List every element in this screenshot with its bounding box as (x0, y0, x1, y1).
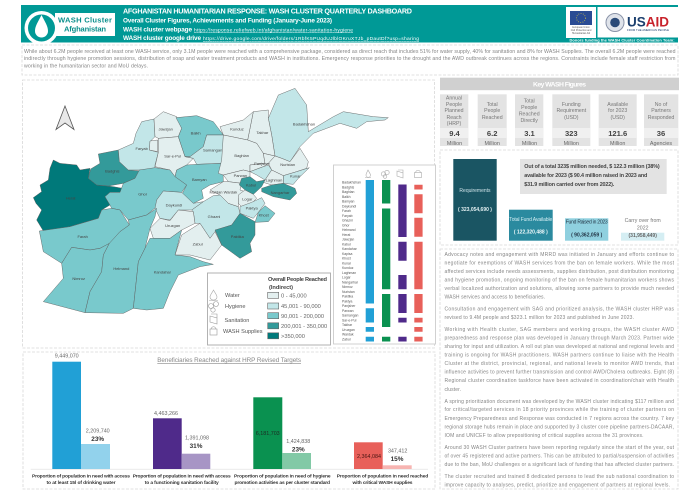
map labels: east: Panjsher (254, 161, 271, 166)
webpage link: https://response.reliefweb.int/afghanistan/water-sanitation-hygiene (194, 28, 353, 34)
legend box: (Indirect) (269, 285, 293, 291)
category labels: with critical WASH supplies (352, 480, 413, 486)
card: reached directly: People (521, 105, 537, 111)
paragraph: consultation: Consultation and engagement with SAG and prioritized analysis, the WASH cluster HRP was (444, 306, 674, 312)
province list: Ghor (342, 223, 350, 227)
province: Herat (33, 160, 123, 231)
province list: Takhar (342, 323, 353, 327)
province list: Kapisa (342, 252, 352, 256)
bars: sanitation (153, 411, 210, 469)
header banner (21, 5, 678, 45)
province: Wardak (210, 182, 245, 207)
province list: Nangarhar (342, 280, 359, 284)
bars: WASH supplies coverage (414, 185, 423, 342)
callout: funding summary: $31.9 million carried over from 2022). (524, 182, 615, 188)
province: Bamyan (175, 163, 223, 203)
paragraph: advocacy: WASH services and access to beneficiaries. (444, 294, 545, 300)
map labels: west: Helmand (113, 266, 129, 271)
province list: Wardak (342, 332, 354, 336)
paragraph: spring prioritization (444, 399, 674, 439)
province: Takhar (248, 110, 275, 156)
legend label: hygiene: Hygiene (225, 304, 246, 310)
province list: Kunduz (342, 266, 354, 270)
card: total reached: 6.2 (487, 129, 497, 138)
paragraph: advocacy: Advocacy notes and engagement with MRRD was initiated in January and efforts continue to (444, 252, 674, 258)
card: planned reach: 9.4 (449, 129, 461, 138)
google drive link: WASH cluster google drive (123, 35, 201, 42)
paragraph: consultation: revised to 9.4M people and $323.1 million for 2023 and published in June 2023. (444, 315, 634, 321)
province: Farah (39, 208, 129, 263)
card: reached directly (515, 94, 543, 147)
province list: Khost (342, 256, 351, 260)
bars: hygiene: 23% (292, 446, 305, 453)
icon: hygiene (208, 302, 218, 312)
card: planned reach: Million (447, 141, 462, 147)
category labels: Proportion of population in need of hygiene (234, 474, 331, 480)
map labels: east: Kabul (246, 183, 256, 188)
bars: critical supplies (354, 442, 412, 469)
logo: USAID: FROM THE AMERICAN PEOPLE (627, 28, 669, 32)
legend ranges (281, 293, 327, 340)
legend title: Overall People Reached (268, 277, 328, 283)
province list: Bamyan (342, 200, 355, 204)
province: Jawzjan (154, 112, 182, 138)
map labels: east: Kunar (290, 173, 301, 178)
paragraph: partners reporting (444, 445, 675, 468)
card: reached directly: 3.1 (524, 129, 536, 138)
map labels: west: Daykundi (166, 203, 182, 208)
map labels: east: Laghman (266, 178, 282, 183)
province: Samangan (185, 135, 223, 164)
category labels: Proportion of population in need reached (337, 474, 428, 480)
donors caption: Donors funding the WASH Cluster Coordination Team: (570, 37, 674, 42)
province: Badakhshan (268, 88, 388, 162)
card: available: for 2023 (608, 108, 627, 114)
legend ranges: 200,001 - 350,000 (281, 324, 327, 330)
panel: overview text: While about 6.2M people received at least one WASH service, only 3.1M people were reached with a comprehensive package, considered as direct reach that includes 51% for water supply, 40% for sanitation and 8% for WASH Supplies. The overall 6.2M people were reached (24, 49, 676, 55)
province: Helmand (85, 208, 157, 313)
panel: map (22, 80, 436, 348)
heading: Key WASH Figures (533, 82, 586, 89)
province: Baghlan (218, 135, 265, 175)
map labels: west: Samangan (203, 148, 222, 153)
map labels: west: Faryab (135, 146, 149, 151)
card: total reached: Reached (482, 115, 503, 121)
card: total reached: Million (485, 141, 500, 147)
province list: Daykundi (342, 204, 356, 208)
province: Nangarhar (262, 183, 297, 200)
card: funding requirement (552, 94, 590, 147)
province: Nuristan (268, 148, 308, 176)
callout: funding summary: Out of a total 323$ million needed, $ 122.3 million (38%) (524, 164, 660, 170)
province: Kapisa (250, 165, 272, 180)
province list: Faryab (342, 214, 353, 218)
category labels: to at least 15l of drinking water (46, 480, 116, 486)
map labels: east: Parwan (234, 173, 247, 178)
card: reached directly: Million (522, 141, 537, 147)
paragraph: AWD preparedness: cluster. (444, 387, 461, 393)
logo: EU civil protection (566, 7, 596, 38)
logo: WASH Cluster Afghanistan (24, 11, 115, 45)
legend label: supplies: WASH Supplies (223, 329, 263, 335)
legend label: sanitation: Sanitation (224, 318, 249, 324)
paragraph: sub national coordination: The cluster recruited and trained 8 dedicated persons to lead the sub national coordination to (444, 474, 674, 480)
map labels: east: Maidan Wardak (209, 190, 237, 195)
legend ranges: 0 - 45,000 (281, 293, 307, 299)
bars: water: 9,449,070 (55, 354, 79, 360)
map labels: west: Jawzjan (158, 127, 173, 132)
map labels: east: Nangarhar (271, 190, 290, 195)
card: funding requirement: (USD) (564, 115, 579, 121)
paragraph: sub national coordination (444, 474, 674, 488)
legend ranges: 45,001 - 90,000 (281, 304, 321, 310)
card: planned reach: People (446, 102, 462, 108)
paragraph: AWD preparedness: training is ongoing for WASH practitioners. WASH partners continue to liaise with the Health (444, 352, 674, 358)
category labels: Proportion of population in need with access (133, 474, 231, 480)
map labels: east: Baghlan (234, 153, 249, 158)
bar: carry over (621, 218, 664, 241)
province list: Logar (342, 276, 352, 280)
bar: fund raised: ( 90,362,059 ) (571, 232, 603, 238)
province: Paktika (215, 213, 255, 258)
province list (342, 180, 361, 341)
paragraph: advocacy: negotiate for exemptions of WASH services from the ban on female workers. While the most (444, 260, 675, 266)
map labels: west: Sar-e-Pul (164, 154, 181, 159)
province list: Parwan (342, 309, 354, 313)
card: available: Million (610, 141, 625, 147)
icon: north arrow (56, 106, 74, 130)
province: Laghman (263, 170, 283, 185)
paragraph: spring prioritization: for critical/targeted services in 18 priority provinces while the training of cluster partners on (444, 407, 674, 413)
card: total reached (478, 94, 507, 147)
province: Jawzjan enclave (149, 140, 158, 152)
province list: Uruzgan (342, 328, 355, 332)
map labels: west: Zabul (193, 241, 203, 246)
panel: narrative text (440, 249, 678, 489)
map labels: east: Badakhshan (293, 122, 315, 127)
card: reached directly: Directly (521, 118, 538, 124)
card: partners: Agencies (650, 141, 672, 147)
map labels: east: Nuristan (280, 162, 295, 167)
paragraph: advocacy (444, 252, 675, 300)
map labels: west: Uruzgan (165, 223, 180, 228)
map labels: west: Herat (66, 195, 76, 200)
paragraph: spring prioritization: IOM and UNICEF to allow prepositioning of critical supplies across the 31 provinces. (444, 433, 644, 439)
province list: Nuristan (342, 290, 355, 294)
panel: funding (440, 150, 678, 245)
map labels: west (66, 127, 222, 281)
card: reached directly: Total (524, 98, 535, 104)
map labels: east: Paktika (231, 234, 245, 239)
logo: EU civil protection: European Union (572, 26, 590, 29)
province list: Samangan (342, 314, 359, 318)
card: total reached: People (484, 108, 500, 114)
category labels: Proportion of population in need with access (32, 474, 130, 480)
bar: fund raised (565, 218, 608, 241)
province list: Badakhshan (342, 180, 361, 184)
map labels: east: Ghazni (208, 214, 220, 219)
legend swatches (268, 292, 279, 339)
callout: funding summary: available for 2023 ($ 90.4 million raised in 2023 and (524, 173, 647, 179)
bars: hygiene (253, 397, 311, 469)
card: partners: Responded (648, 115, 674, 121)
card: planned reach: Planned (444, 108, 464, 114)
province list: Balkh (342, 195, 351, 199)
bars: critical supplies: 347,412 (388, 449, 407, 455)
province list: Sar-e-Pul (342, 318, 357, 322)
logo: WASH Cluster Afghanistan: WASH Cluster (58, 16, 112, 24)
province list: Ghazni (342, 218, 353, 222)
paragraph: AWD preparedness: Regional cluster coordination taskforce have been activated in coordination/chair with Health (444, 378, 674, 384)
map: eastern and northeastern provinces (208, 88, 388, 258)
bars: water: 23% (91, 436, 104, 443)
panel: overview text (22, 45, 678, 75)
card: funding requirement: Funding (562, 102, 581, 108)
webpage link (123, 26, 353, 34)
bar: carry over: (31,958,449) (629, 233, 657, 239)
bars: hygiene coverage (382, 180, 390, 342)
province: Kunduz (220, 112, 253, 140)
map labels: east: Takhar (256, 130, 269, 135)
map labels: west: Badghis (105, 169, 120, 174)
legend label: water: Water (225, 293, 240, 299)
province: Khost (255, 206, 275, 222)
category labels: promotion activities as per cluster standard (235, 480, 330, 486)
bar: fund raised: Fund Raised in 2023 (566, 220, 608, 226)
card: partners (644, 94, 678, 147)
paragraph: sub national coordination: improve capacity to analyses, predict, prioritize and engagement of partners at regional levels. (444, 482, 670, 488)
bars: sanitation: 4,463,266 (154, 411, 178, 417)
paragraph: partners reporting: Around 30 WASH Cluster partners have been reporting regularly since the start of the year, out (444, 445, 675, 451)
bars: sanitation: 31% (190, 443, 203, 450)
card: partners: 36 (657, 129, 665, 138)
paragraph: AWD preparedness (444, 327, 675, 393)
bars: sanitation coverage (398, 184, 407, 342)
card: funding requirement: Requirement (556, 108, 587, 114)
bar: carry over: Carry over from (625, 218, 661, 224)
icon: water (209, 290, 218, 300)
bars: water coverage (366, 180, 374, 342)
category labels (32, 474, 428, 486)
card: available (599, 94, 637, 147)
province list: Helmand (342, 228, 356, 232)
province: Badghis (88, 150, 139, 186)
paragraph: advocacy: and hygiene promotion, ongoing monitoring of the ban on female humanitarian workers shows (444, 278, 674, 284)
province: Panjsher (250, 153, 275, 172)
card: planned reach: Reach (446, 115, 462, 121)
paragraph: spring prioritization: Emergency Preparedness and Response was conducted in 7 regions across the country. 7 key (444, 416, 674, 422)
province list: Herat (342, 233, 350, 237)
panel: overview text: indirectly through hygiene promotion sessions, distribution of soap and water treatment products and WASH in institutions. Emergency response priorities to the drought and the AWD outbreak continues across the regions. Constraints include female staff restriction from (24, 56, 676, 62)
donor logos (566, 7, 678, 42)
province list: Baghlan (342, 190, 355, 194)
province list: Paktya (342, 299, 352, 303)
province list: Farah (342, 209, 351, 213)
card: total reached: Total (487, 102, 498, 108)
webpage link: WASH cluster webpage (123, 26, 192, 34)
title: AFGHANISTAN HUMANITARIAN RESPONSE: WASH CLUSTER QUARTERLY DASHBOARD (123, 6, 412, 15)
bars: hygiene: 1,424,838 (286, 439, 310, 445)
province: Ghazni (192, 195, 240, 238)
province: Sar-e-Pul (155, 137, 193, 177)
bars: water: 2,209,740 (86, 429, 110, 435)
paragraph: AWD preparedness: preparedness and response plan was developed in January through March 2023. Partner wide (444, 336, 674, 342)
legend ranges: 90,001 - 200,000 (281, 314, 324, 320)
paragraph: AWD preparedness: Working with Health cluster, SAG members and working groups, the WASH cluster AWD (444, 327, 674, 333)
province: Uruzgan (150, 210, 195, 238)
province: Zabul (175, 223, 222, 260)
legend ranges: >350,000 (281, 334, 305, 340)
callout: funding summary (520, 159, 667, 194)
map labels: east: Khost (259, 212, 270, 217)
province: Faryab (118, 119, 158, 170)
bar: total fund available: Total Fund Available (509, 217, 553, 223)
icon: supplies (210, 327, 217, 335)
province: Nimroz (43, 243, 109, 313)
province: Balkh (176, 116, 223, 157)
card: reached directly: Reached (519, 112, 540, 118)
chart title: Beneficiaries Reached against HRP Revised Targets (157, 357, 301, 364)
map labels: west: Bamyan (192, 177, 207, 182)
province list: Kandahar (342, 247, 358, 251)
card: partners: No of (655, 102, 668, 108)
card: available: 121.6 (608, 129, 627, 138)
province: Daykundi (155, 191, 203, 220)
heading (440, 78, 679, 90)
province list: Jawzjan (342, 238, 354, 242)
logo: USAID: USAID (627, 14, 669, 30)
bar: carry over: 2022 (637, 226, 649, 232)
map labels: west: Nimroz (72, 276, 85, 281)
card: funding requirement: Million (564, 141, 579, 147)
panel: beneficiaries chart (23, 352, 435, 489)
paragraph: AWD preparedness: sharing for input and utilization. A roll out plan was developed at national and regional levels and (444, 344, 674, 350)
map labels: west: Farah (77, 234, 88, 239)
province: Ghor (105, 168, 187, 220)
logo: EU civil protection: Civil Protection and (571, 29, 592, 32)
google drive link: https://drive.google.com/drive/folders/1RbfK5PUqdUJlblOKruXTJb_pDautDf?usp=sharing (203, 36, 419, 42)
card: planned reach: (HRP) (447, 121, 461, 127)
icons: sector headers (365, 170, 422, 178)
province list: Badghis (342, 185, 355, 189)
panel: key WASH figures (440, 78, 679, 147)
province list: Kabul (342, 242, 351, 246)
province: Kabul (239, 177, 265, 194)
province list: Nimroz (342, 285, 353, 289)
bar: total fund available: ( 122,320,488 ) (514, 230, 548, 236)
paragraph: AWD preparedness: Cluster at the district, provincial, regional, and national levels to monitor AWD trends, that (444, 361, 675, 367)
province: Logar (238, 190, 257, 207)
logo: WASH Cluster Afghanistan: Afghanistan (64, 24, 106, 34)
bars: critical supplies: 2,364,084 (357, 454, 381, 460)
bars: water (52, 354, 110, 469)
province: Paktya (240, 198, 265, 218)
card: funding requirement: 323 (565, 129, 578, 138)
province: Kunar (283, 168, 309, 184)
paragraph: partners reporting: due to the ban, MoU challenges or a significant lack of funding that has affected cluster partners. (444, 462, 674, 468)
paragraph: AWD preparedness: influence activities to prevent further transmission and control AWD/Cholera outbreaks. Eight (8) (444, 370, 674, 376)
map labels: east: Kunduz (230, 126, 244, 131)
province list: Kunar (342, 261, 352, 265)
paragraph: spring prioritization: A spring prioritization document was developed by the WASH cluster indicating $117 million and (444, 399, 674, 405)
google drive link (123, 35, 419, 42)
paragraph: consultation (444, 306, 674, 321)
province list: Zabul (342, 337, 351, 341)
legend box (208, 273, 330, 345)
bar: total fund available (509, 210, 553, 241)
bar: requirements: Requirements (459, 188, 491, 194)
bars: critical supplies: 15% (391, 456, 404, 463)
bars: sanitation: 1,391,098 (185, 436, 209, 442)
bar: requirements (453, 159, 497, 241)
paragraph: partners reporting: of over 45 registered and active partners. This can be attributed to partial/suspension of activities (444, 454, 674, 460)
subtitle: Overall Cluster Figures, Achievements and Funding (January-June 2023) (123, 18, 332, 24)
province: Parwan (223, 170, 250, 183)
map labels: west: Ghor (138, 191, 148, 196)
icon: sanitation (210, 314, 217, 324)
map labels: east: Paktya (246, 206, 259, 211)
paragraph: advocacy: affected services include needs assessments, supplies distribution, post distribution monitoring (444, 269, 674, 275)
card: available: Available (607, 102, 628, 108)
province: Kandahar (133, 230, 213, 310)
card: available: (USD) (610, 115, 625, 121)
category labels: to a functioning sanitation facility (145, 480, 219, 486)
paragraph: advocacy: verbal localized authorization and solutions, allowing some partners to provide much needed (444, 286, 674, 292)
map: western and central provinces (33, 112, 240, 313)
card: partners: Partners (651, 108, 671, 114)
province list: Paktika (342, 294, 353, 298)
province list: Panjsher (342, 304, 356, 308)
panel: province coverage matrix (334, 165, 436, 344)
logo: USAID (598, 7, 678, 38)
panel: overview text: working in the humanitarian sector and MoU delays. (24, 64, 148, 70)
card: planned reach: Annual (446, 96, 462, 102)
map labels: east: Logar (242, 196, 253, 201)
paragraph: spring prioritization: regional storage hubs remain in place and supported by 3 cluster core pipeline partners-DACAAR, (444, 424, 674, 430)
province list: Laghman (342, 271, 356, 275)
map labels: east (208, 122, 315, 239)
bar: requirements: ( 323,054,690 ) (458, 207, 492, 213)
map labels: west: Kandahar (154, 269, 172, 274)
card: planned reach (440, 94, 468, 147)
bars: hygiene: 6,181,703 (256, 431, 280, 437)
map labels: west: Balkh (191, 131, 201, 136)
logo: EU civil protection: Humanitarian Aid (572, 32, 591, 35)
